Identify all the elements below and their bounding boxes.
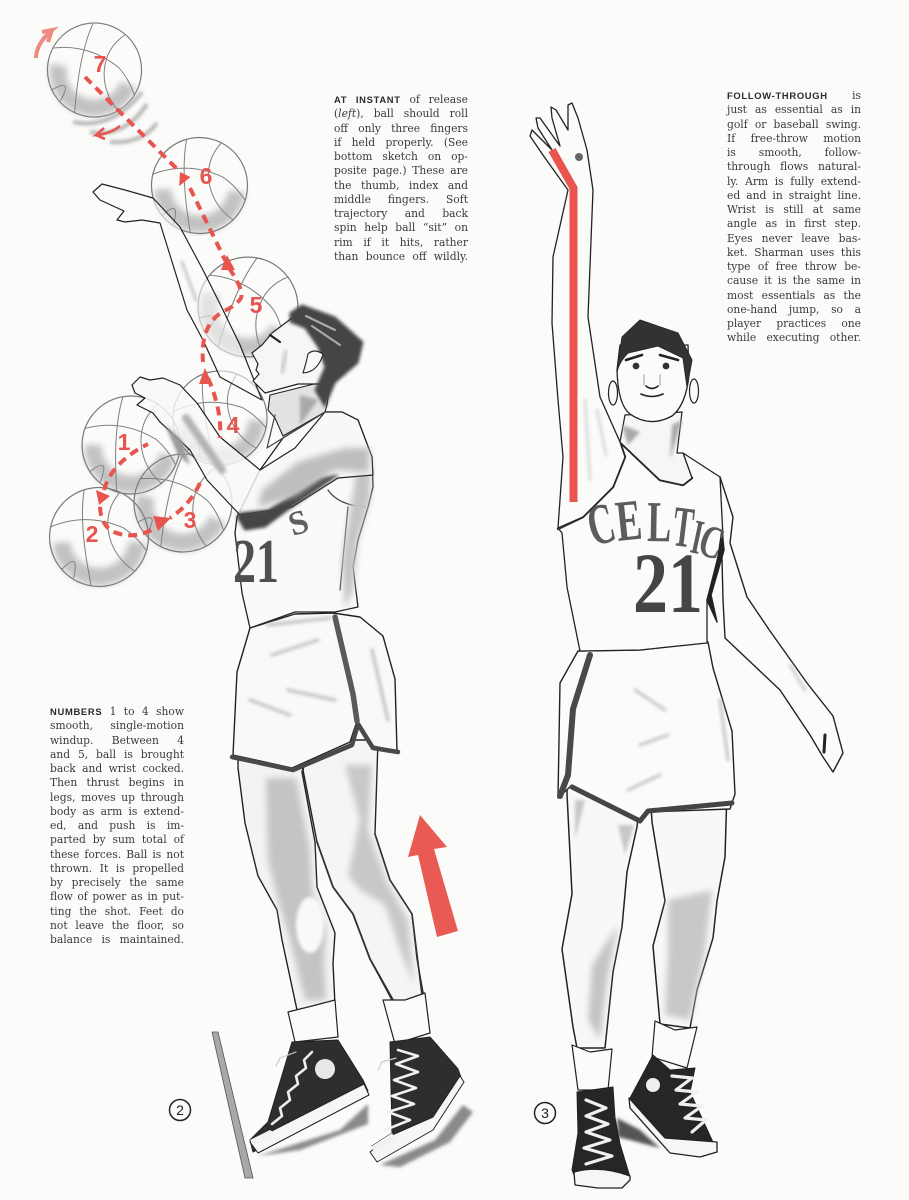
text block: numbers 1 to 4: and 5, ball is brought: [50, 748, 184, 761]
text block: follow-through: angle as in first step.: [727, 217, 861, 230]
text block: at instant of release: bottom sketch on op-: [334, 150, 468, 163]
text block: follow-through: ket. Sharman uses this: [727, 246, 861, 259]
figure 3: follow-through front view: [530, 103, 843, 1188]
jersey lettering CELTIC: I: [687, 509, 708, 565]
jersey lettering CELTIC: [581, 487, 731, 570]
text block: numbers 1 to 4: not leave the floor, so: [50, 919, 184, 932]
figure marker 3: [534, 1102, 556, 1124]
shoe shadows: [258, 1104, 473, 1167]
rear shoe: [250, 1040, 369, 1153]
text block: numbers 1 to 4: balance is maintained.: [50, 933, 184, 946]
text block: at instant of release: rim if it hits, rather: [334, 236, 468, 248]
text block: numbers 1 to 4: Then thrust begins in: [50, 776, 184, 789]
text block: at instant of release: AT INSTANT of release: [334, 93, 468, 106]
large red upward arrow: [408, 815, 458, 937]
raised arm and hand: [530, 103, 625, 528]
spin arrows near ball 7: [36, 30, 120, 139]
text block: follow-through: ly. Arm is fully extend-: [727, 174, 861, 188]
right shoe angled: [629, 1055, 717, 1157]
text block: follow-through: player practices one: [727, 317, 861, 330]
text block: follow-through: just as essential as in: [727, 103, 861, 116]
text block: numbers 1 to 4: legs, moves up through: [50, 790, 184, 804]
basketball 2: [43, 481, 155, 593]
motion arcs below ball 7: [73, 92, 157, 142]
text block: numbers 1 to 4: by precisely the same: [50, 876, 184, 889]
red ball path dashes: [85, 77, 242, 535]
text block: follow-through: golf or baseball swing.: [727, 118, 861, 130]
text block: follow-through: cause it is the same in: [727, 274, 861, 287]
jersey number 21: 21: [233, 528, 279, 596]
jersey number 21: 21: [633, 535, 703, 631]
red step numbers: 6: [200, 163, 212, 189]
jersey lettering CELTIC: C: [581, 491, 621, 559]
red step numbers: 2: [86, 521, 98, 547]
text block: at instant of release: off only three fingers: [334, 122, 468, 134]
jersey lettering CELTIC: L: [647, 491, 672, 555]
red arm alignment line: [552, 150, 574, 502]
shoe shadow: [617, 1118, 660, 1148]
red step numbers: 3: [184, 507, 196, 533]
text block: numbers 1 to 4: windup. Between 4: [50, 734, 184, 746]
neck and head: [252, 305, 363, 436]
text block: at instant of release: trajectory and back: [334, 207, 468, 220]
text block: numbers 1 to 4: back and wrist cocked.: [50, 762, 184, 775]
text block: at instant of release: posite page.) These are: [334, 164, 468, 177]
text block: follow-through: most essentials as the: [727, 288, 861, 302]
basketball 3: [126, 446, 240, 560]
text block: follow-through: one-hand jump, so a: [727, 303, 861, 316]
text block: at instant of release: if held properly. (See: [334, 136, 468, 149]
basketball 7: [41, 17, 148, 123]
text block: follow-through: ed and in straight line.: [727, 189, 861, 202]
socks: [288, 993, 430, 1044]
legs: [238, 740, 424, 1010]
lowered arm and hand: [720, 477, 843, 772]
figure marker 2: 2: [176, 1102, 184, 1118]
red step numbers: 1: [118, 429, 131, 455]
jersey: [233, 412, 373, 628]
text block: follow-through: through flows natural-: [727, 160, 861, 173]
red step numbers: 5: [250, 292, 263, 318]
front shoe: [370, 1037, 464, 1162]
text block: at instant of release: the thumb, index and: [334, 178, 468, 192]
shorts: [558, 642, 735, 822]
text block: at instant of release: than bounce off wildly.: [334, 250, 468, 263]
basketball 6: [147, 133, 252, 238]
jersey: [558, 442, 731, 651]
figure marker 2: [170, 1100, 190, 1120]
red step numbers: 7: [94, 51, 106, 77]
text block: numbers 1 to 4: [50, 705, 185, 946]
text block: numbers 1 to 4: these forces. Ball is not: [50, 848, 184, 860]
basketball 4: [164, 362, 276, 474]
neck and head: [608, 320, 698, 485]
front shooting arm and hand: [132, 377, 373, 530]
text block: numbers 1 to 4: thrown. It is propelled: [50, 862, 184, 875]
left shoe front view: [572, 1087, 630, 1188]
legs: [562, 770, 727, 1048]
jersey lettering CELTIC: T: [669, 494, 697, 560]
red step numbers: 4: [227, 412, 240, 438]
text block: numbers 1 to 4: smooth, single-motion: [50, 719, 184, 732]
text block: at instant of release: spin help ball “sit” on: [334, 221, 468, 234]
socks: [572, 1021, 697, 1090]
text block: follow-through: Eyes never leave bas-: [727, 232, 861, 244]
text block: numbers 1 to 4: NUMBERS 1 to 4 show: [50, 705, 184, 718]
floor line: [212, 1032, 253, 1178]
red dashed path arrowheads: [96, 171, 235, 531]
text block: follow-through: while executing other.: [727, 331, 861, 344]
text block: at instant of release: (left), ball should roll: [334, 107, 468, 120]
figure 2: shooter in profile: [93, 184, 473, 1167]
jersey lettering: S: [284, 503, 313, 544]
text block: follow-through: [726, 89, 861, 344]
text block: follow-through: type of free throw be-: [727, 260, 861, 273]
text block: numbers 1 to 4: body as arm is extend-: [50, 805, 184, 818]
basketball 1: [82, 396, 180, 494]
red step numbers: [86, 51, 263, 547]
text block: numbers 1 to 4: ed, and push is im-: [50, 819, 184, 832]
jersey lettering CELTIC: C: [693, 514, 731, 570]
text block: follow-through: If free-throw motion: [727, 132, 861, 145]
text block: follow-through: Wrist is still at same: [727, 203, 861, 216]
text block: numbers 1 to 4: flow of power as in put-: [50, 890, 184, 903]
basketball 5: [184, 243, 312, 371]
text block: at instant of release: [334, 93, 468, 263]
figure marker 3: 3: [541, 1105, 549, 1121]
jersey lettering CELTIC: E: [613, 487, 645, 554]
text block: follow-through: is smooth, follow-: [727, 146, 861, 159]
text block: numbers 1 to 4: ting the shot. Feet do: [50, 904, 184, 918]
text block: at instant of release: middle fingers. Soft: [334, 193, 468, 206]
text block: follow-through: FOLLOW-THROUGH is: [727, 89, 861, 102]
raised far arm and hand: [93, 184, 262, 400]
text block: numbers 1 to 4: parted by sum total of: [50, 833, 184, 846]
shorts: [232, 613, 398, 770]
